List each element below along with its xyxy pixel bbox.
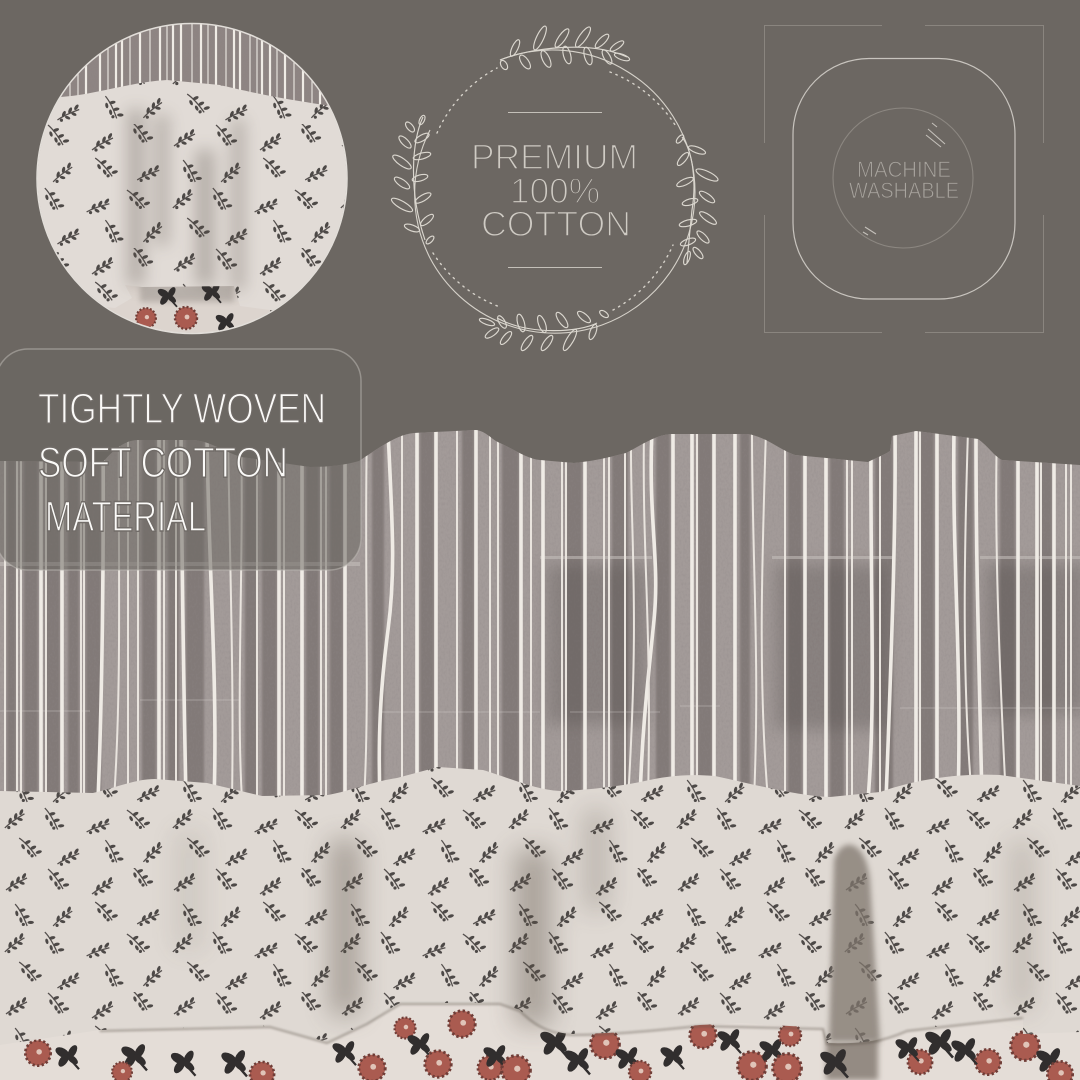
panel: fabric detail circle — [30, 20, 347, 340]
badge text: PREMIUM — [471, 138, 638, 177]
washable text: WASHABLE — [849, 178, 959, 203]
hem shadow — [100, 1004, 1023, 1044]
badge text: 100% — [510, 172, 600, 211]
floral lower ruffle — [0, 1000, 1080, 1080]
callout text: MATERIAL — [45, 493, 206, 541]
corner frame — [764, 26, 1044, 332]
callout text: TIGHTLY WOVEN — [38, 385, 326, 433]
badge rule top — [508, 112, 602, 114]
detail: stripes — [61, 24, 328, 106]
badge: machine washable — [764, 26, 1044, 332]
badge: premium 100% cotton — [390, 25, 719, 352]
badge rule bottom — [508, 266, 602, 268]
wreath branch top — [499, 25, 630, 71]
detail: printed ruffle — [30, 80, 347, 314]
rounded washer outline — [793, 58, 1015, 299]
wreath branch right — [675, 134, 719, 265]
printed ruffle — [0, 767, 1080, 1045]
detail: floral underlayer — [103, 285, 270, 333]
drum glints — [863, 123, 945, 235]
washable text: MACHINE — [857, 157, 951, 182]
wreath branch bottom — [479, 309, 610, 352]
wreath branch left — [390, 114, 435, 245]
hem light ledges — [0, 556, 1080, 566]
washer drum circle — [833, 108, 973, 248]
ruffle fold shadows — [175, 810, 1034, 1025]
callout text: SOFT COTTON — [38, 439, 288, 487]
white stripes wide — [41, 430, 1054, 800]
badge text — [471, 138, 638, 244]
callout text — [38, 385, 326, 541]
washable text — [849, 157, 959, 203]
curtain photo — [0, 420, 1080, 1080]
stitched line — [0, 700, 1080, 712]
panel: tightly woven callout — [0, 349, 361, 570]
striped header fabric — [0, 420, 1080, 800]
white stripes thin — [5, 430, 1071, 800]
wreath ring — [415, 50, 695, 333]
badge text: COTTON — [481, 205, 631, 244]
pocket shadows below hem — [546, 564, 1080, 729]
